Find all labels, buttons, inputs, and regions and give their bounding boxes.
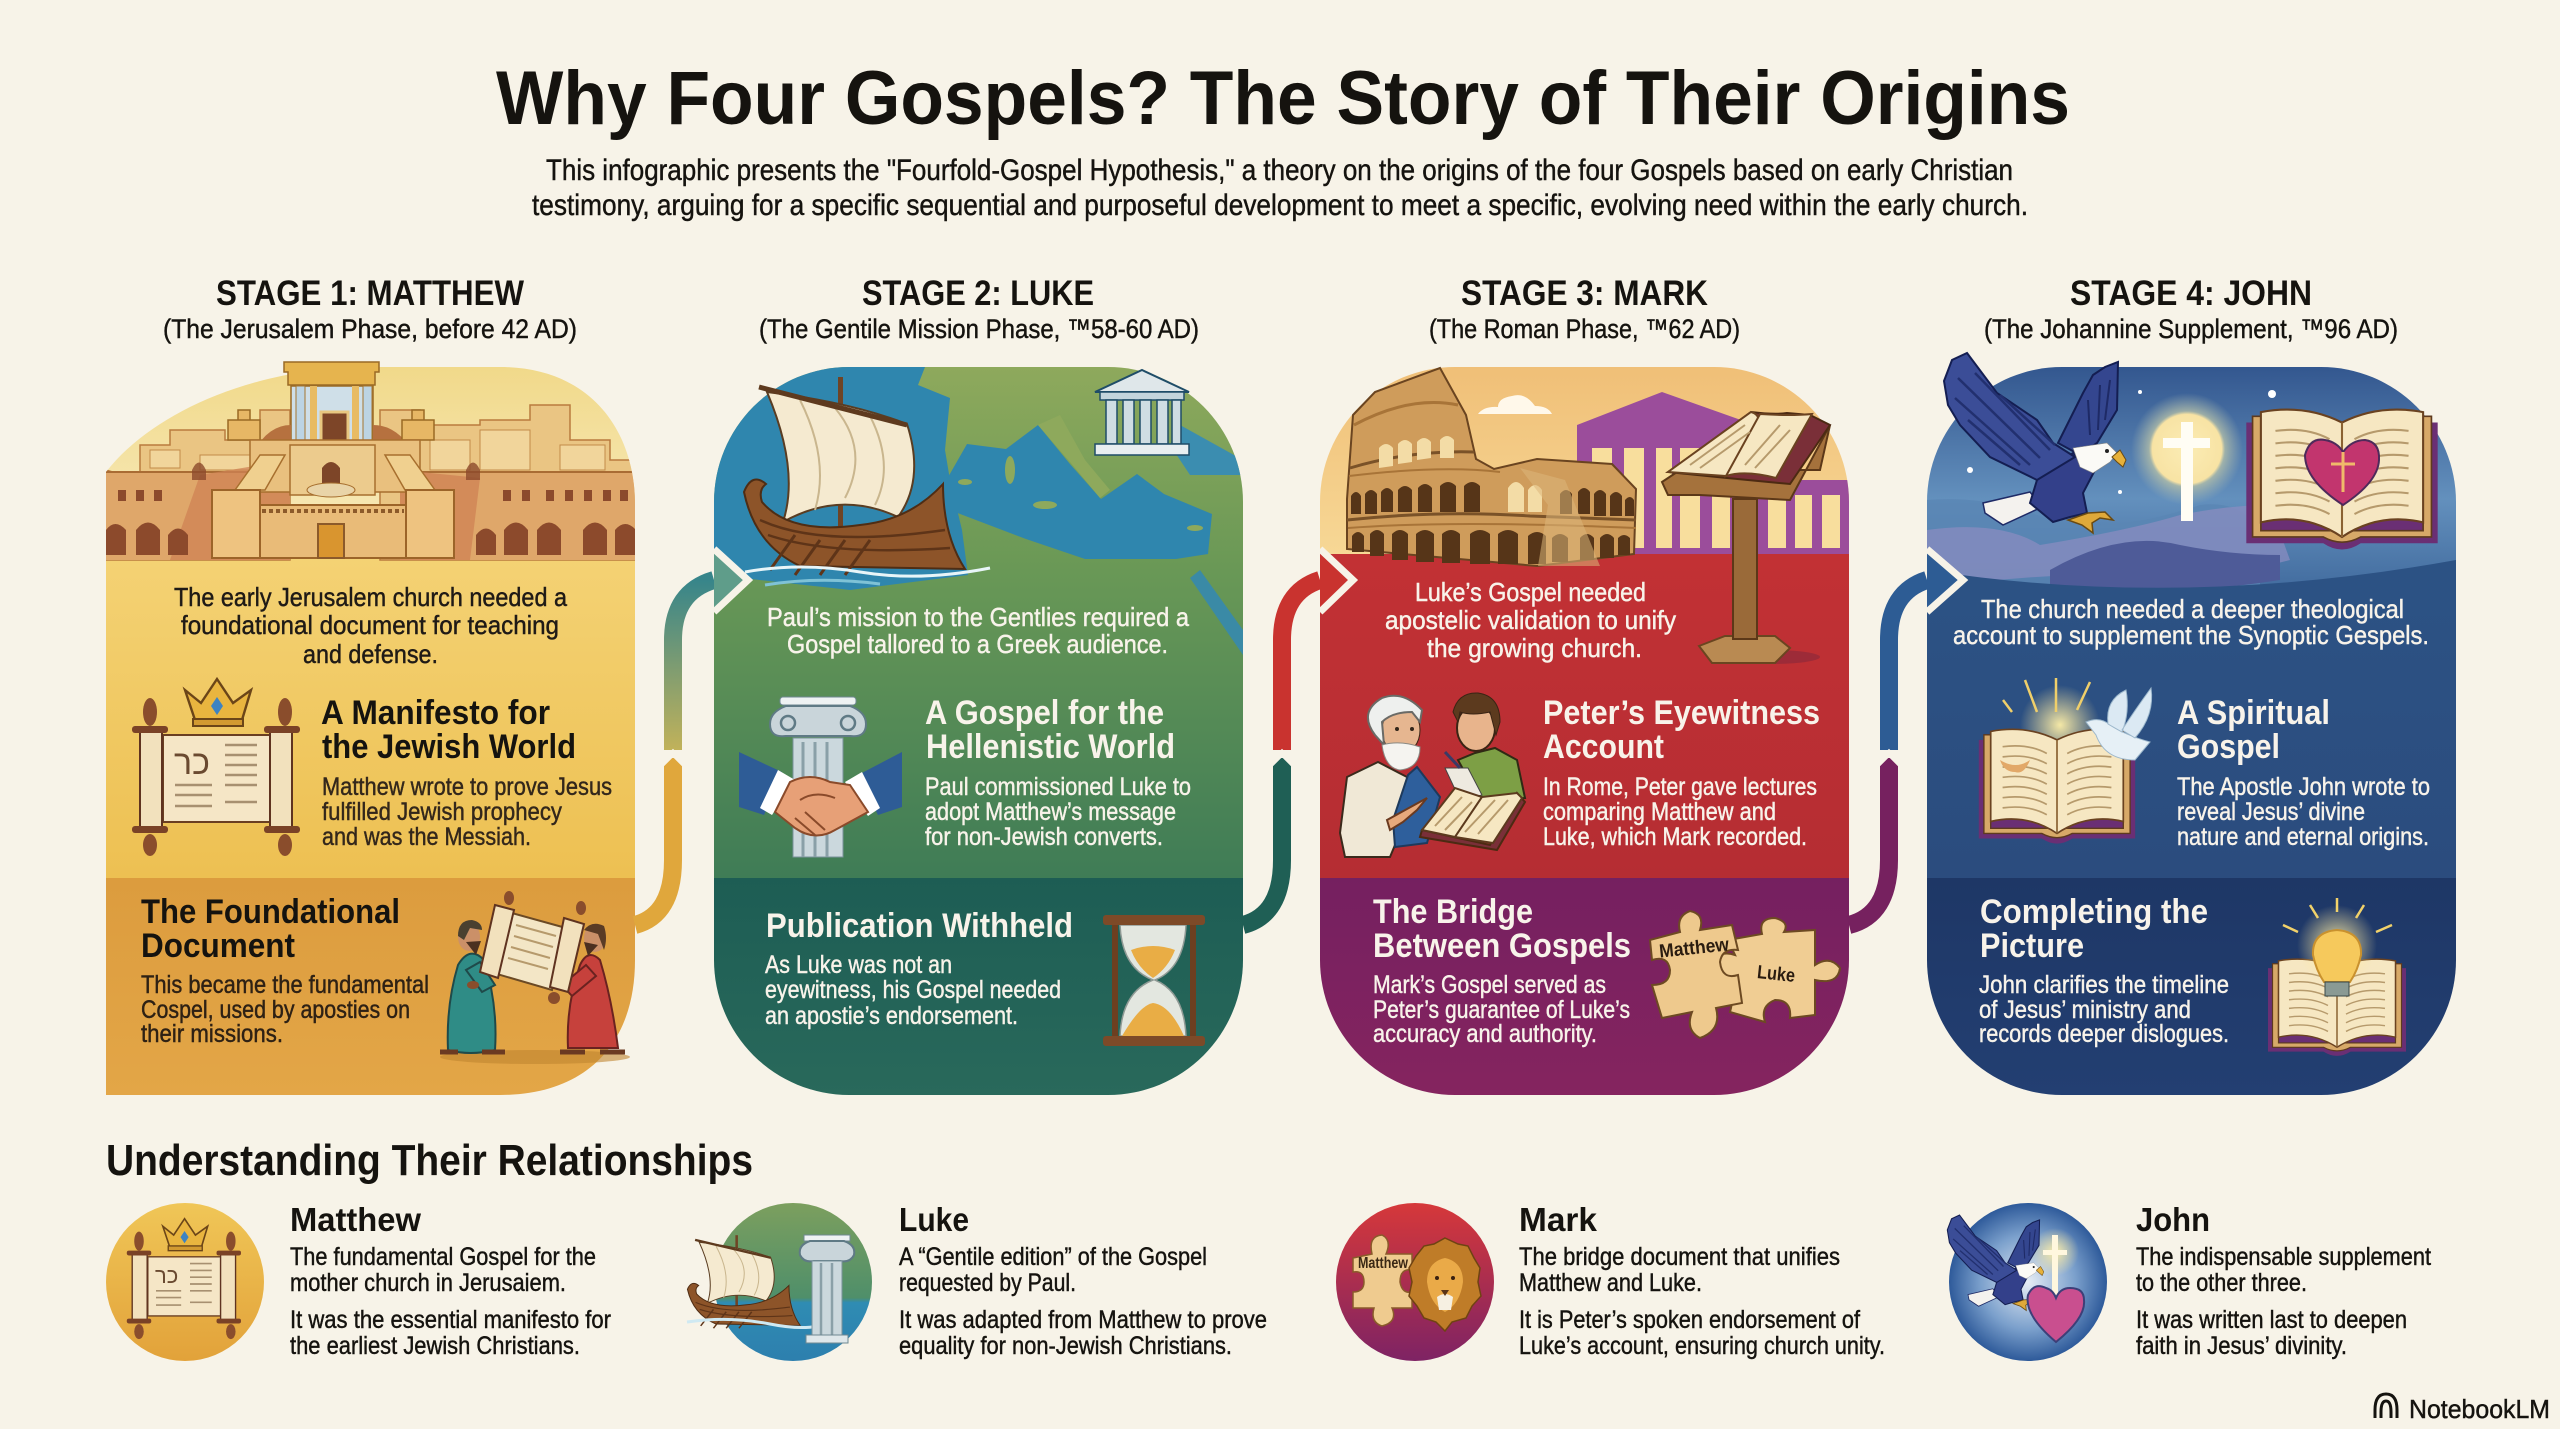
icon: puzzle pieces <box>1650 911 1840 1038</box>
text: John summary: The indispensable supplement <box>2136 1243 2431 1271</box>
heading: A Spiritual Gospel <box>2177 694 2330 766</box>
text: manifesto description: Matthew wrote to prove Jesus <box>322 773 612 801</box>
text: Mark summary <box>1519 1201 1885 1360</box>
text: bridge description <box>1373 971 1630 1048</box>
text: foundational description <box>141 971 429 1048</box>
text: need <box>767 602 1189 659</box>
icon: temple <box>1095 370 1189 455</box>
stage heading: Matthew: STAGE 1: MATTHEW <box>216 274 524 313</box>
text: hellenistic description <box>925 773 1191 851</box>
heading: A Manifesto: A Manifesto for <box>321 694 550 732</box>
summary: John <box>1947 1201 2431 1361</box>
text: Luke summary <box>899 1201 1267 1360</box>
text: spiritual description <box>2177 773 2430 851</box>
text: need: apostelic validation to unify <box>1385 605 1676 635</box>
text: need: Paul’s mission to the Gentlies required a <box>767 602 1189 632</box>
text: John summary: It was written last to deepen <box>2136 1306 2407 1334</box>
logo: NotebookLM: NotebookLM <box>2409 1394 2550 1424</box>
text: Peter description <box>1543 773 1817 851</box>
text: need <box>1385 577 1676 663</box>
intro text: testimony, arguing for a specific sequential and purposeful development to meet a specific, evolving need within the early church. <box>532 189 2028 222</box>
icon: Peter and Mark <box>1340 693 1525 857</box>
icon: book with light bulb <box>2268 898 2406 1056</box>
text: John summary: John <box>2136 1201 2210 1238</box>
text: Matthew summary: Matthew <box>290 1201 421 1238</box>
heading: A Gospel for the Hellenistic World: Hellenistic World <box>926 728 1175 766</box>
scene: Mediterranean map <box>714 367 1243 655</box>
heading: The Bridge Between Gospels <box>1373 893 1631 965</box>
text: Luke summary: Luke <box>899 1201 969 1238</box>
summary: Matthew <box>106 1201 611 1361</box>
icon: two apostles carrying scroll <box>440 891 630 1064</box>
heading: Understanding Their Relationships: Understanding Their Relationships <box>106 1136 753 1185</box>
heading: The Bridge Between Gospels: The Bridge <box>1373 893 1533 931</box>
text: spiritual description: reveal Jesus’ divine <box>2177 798 2365 826</box>
text: bridge description: accuracy and authority. <box>1373 1020 1597 1048</box>
icon: open book with heart <box>2246 410 2438 549</box>
heading: A Gospel for the Hellenistic World: A Gospel for the <box>925 694 1164 732</box>
text: Mark summary: The bridge document that unifies <box>1519 1243 1840 1271</box>
icon: Mark badge: Matthew <box>1358 1255 1408 1272</box>
text: need: account to supplement the Synoptic Gespels. <box>1953 620 2429 650</box>
text: Luke summary: It was adapted from Matthew to prove <box>899 1306 1267 1334</box>
title: Why Four Gospels? The Story of Their Origins <box>496 56 2070 141</box>
icon: puzzle pieces: Luke <box>1756 962 1796 987</box>
text: Luke summary: requested by Paul. <box>899 1269 1076 1297</box>
text: Matthew summary: The fundamental Gospel for the <box>290 1243 596 1271</box>
icon: scroll and crown: כר <box>174 744 210 782</box>
icon: hourglass <box>1103 915 1205 1046</box>
text: spiritual description: nature and eternal origins. <box>2177 823 2429 851</box>
text: Mark summary: Matthew and Luke. <box>1519 1269 1702 1297</box>
text: foundational description: their missions. <box>141 1020 283 1048</box>
icon: glowing book and dove <box>1979 678 2152 844</box>
heading: The Foundational Document <box>141 893 400 965</box>
summary: Mark <box>1336 1201 1885 1361</box>
text: need: the growing church. <box>1427 633 1642 663</box>
heading: The Foundational Document: Document <box>141 927 295 965</box>
text: bridge description: Mark’s Gospel served as <box>1373 971 1606 999</box>
stage heading: Mark <box>1429 274 1740 344</box>
stage heading: John: (The Johannine Supplement, ™96 AD) <box>1984 314 2398 344</box>
heading: Publication Withheld: Publication Withheld <box>766 907 1073 945</box>
text: Matthew summary: the earliest Jewish Christians. <box>290 1332 580 1360</box>
text: need: Gospel tallored to a Greek audience. <box>787 629 1168 659</box>
text: Matthew summary <box>290 1201 611 1360</box>
text: Mark summary: Mark <box>1519 1201 1598 1238</box>
panel: stage 4 John <box>1927 353 2456 1095</box>
text: Peter description: Luke, which Mark recorded. <box>1543 823 1807 851</box>
panel: stage 2 Luke <box>714 367 1243 1095</box>
panel: stage 1 Matthew <box>106 362 640 1095</box>
heading: Peter's Eyewitness Account: Peter’s Eyewitness <box>1543 694 1820 732</box>
text: manifesto description <box>322 773 612 851</box>
text: need <box>1953 594 2429 650</box>
summary: Luke <box>687 1201 1267 1361</box>
illustration: lectern with book <box>1662 412 1830 664</box>
icon: ship <box>744 377 990 585</box>
stage heading: Matthew: (The Jerusalem Phase, before 42 AD) <box>163 314 577 344</box>
icon: puzzle pieces: Matthew <box>1658 934 1730 963</box>
stage heading: Mark: (The Roman Phase, ™62 AD) <box>1429 314 1740 344</box>
text: Mark summary: Luke’s account, ensuring church unity. <box>1519 1332 1885 1360</box>
text: need: The early Jerusalem church needed a <box>174 582 567 612</box>
arrow: Luke to Mark <box>1243 549 1353 925</box>
icon: John badge <box>1947 1203 2107 1361</box>
text: manifesto description: and was the Messiah. <box>322 823 531 851</box>
heading: A Manifesto <box>321 694 576 766</box>
arrow: Mark to John <box>1849 549 1963 925</box>
icon: column and handshake <box>739 697 902 857</box>
text: publication description: an apostie’s endorsement. <box>765 1002 1018 1030</box>
text: John summary: faith in Jesus’ divinity. <box>2136 1332 2347 1360</box>
stage heading: John: STAGE 4: JOHN <box>2070 274 2312 313</box>
stage heading: John <box>1984 274 2398 344</box>
text: Peter description: In Rome, Peter gave lectures <box>1543 773 1817 801</box>
text: need: foundational document for teaching <box>181 610 559 640</box>
icon: eagle <box>1944 353 2126 533</box>
text: completing description: John clarifies the timeline <box>1979 971 2229 999</box>
text: Mark summary: It is Peter’s spoken endorsement of <box>1519 1306 1860 1334</box>
icon: Matthew badge: כר <box>155 1263 178 1288</box>
heading: A Manifesto: the Jewish World <box>322 728 576 766</box>
text: spiritual description: The Apostle John wrote to <box>2177 773 2430 801</box>
icon: glowing cross <box>2131 393 2243 521</box>
text: need: Luke’s Gospel needed <box>1415 577 1646 607</box>
panel: stage 3 Mark <box>1320 367 1849 1095</box>
text: Luke summary: equality for non-Jewish Christians. <box>899 1332 1232 1360</box>
icon: Luke badge <box>687 1203 872 1361</box>
text: hellenistic description: Paul commissioned Luke to <box>925 773 1191 801</box>
icon: Mark badge <box>1336 1203 1494 1361</box>
scene: Jerusalem temple <box>106 362 640 560</box>
text: bridge description: Peter’s guarantee of Luke’s <box>1373 996 1630 1024</box>
heading: Completing the Picture: Completing the <box>1980 893 2208 931</box>
intro text <box>532 154 2028 222</box>
text: completing description <box>1979 971 2229 1048</box>
text: publication description: As Luke was not an <box>765 951 952 979</box>
text: completing description: of Jesus’ ministry and <box>1979 996 2191 1024</box>
text: John summary: to the other three. <box>2136 1269 2307 1297</box>
stage heading: Luke: STAGE 2: LUKE <box>862 274 1094 313</box>
heading: Completing the Picture: Picture <box>1980 927 2084 965</box>
text: publication description: eyewitness, his Gospel needed <box>765 976 1061 1004</box>
stage heading: Matthew <box>163 274 577 344</box>
text: Matthew summary: mother church in Jerusaiem. <box>290 1269 566 1297</box>
text: completing description: records deeper dislogues. <box>1979 1020 2229 1048</box>
intro text: This infographic presents the "Fourfold-Gospel Hypothesis," a theory on the origins of the four Gospels based on early Christian <box>546 154 2013 187</box>
heading: A Gospel for the Hellenistic World <box>925 694 1175 766</box>
text: hellenistic description: for non-Jewish converts. <box>925 823 1163 851</box>
stage heading: Luke <box>759 274 1199 344</box>
heading: A Spiritual Gospel: A Spiritual <box>2177 694 2330 732</box>
text: foundational description: Cospel, used by aposties on <box>141 996 410 1024</box>
text: Luke summary: A “Gentile edition” of the Gospel <box>899 1243 1207 1271</box>
text: publication description <box>765 951 1061 1030</box>
illustration: Colosseum <box>1347 368 1636 566</box>
heading: Peter's Eyewitness Account <box>1543 694 1820 766</box>
icon: scroll and crown <box>132 679 300 856</box>
heading: Completing the Picture <box>1980 893 2208 965</box>
scene: temple <box>1478 392 1849 554</box>
text: John summary <box>2136 1201 2431 1360</box>
text: foundational description: This became the fundamental <box>141 971 429 999</box>
text: Peter description: comparing Matthew and <box>1543 798 1776 826</box>
text: manifesto description: fulfilled Jewish prophecy <box>322 798 562 826</box>
icon: Matthew badge <box>106 1203 264 1361</box>
text: Matthew summary: It was the essential manifesto for <box>290 1306 611 1334</box>
heading: The Foundational Document: The Foundational <box>141 893 400 931</box>
heading: Peter's Eyewitness Account: Account <box>1543 728 1664 766</box>
stage heading: Mark: STAGE 3: MARK <box>1461 274 1708 313</box>
text: need <box>174 582 567 669</box>
arrow: Matthew to Luke <box>635 549 748 925</box>
heading: The Bridge Between Gospels: Between Gospels <box>1373 927 1631 965</box>
text: need: and defense. <box>303 639 438 669</box>
stage heading: Luke: (The Gentile Mission Phase, ™58-60 AD) <box>759 314 1199 344</box>
text: hellenistic description: adopt Matthew’s message <box>925 798 1176 826</box>
heading: A Spiritual Gospel: Gospel <box>2177 728 2280 766</box>
text: need: The church needed a deeper theological <box>1981 594 2404 624</box>
